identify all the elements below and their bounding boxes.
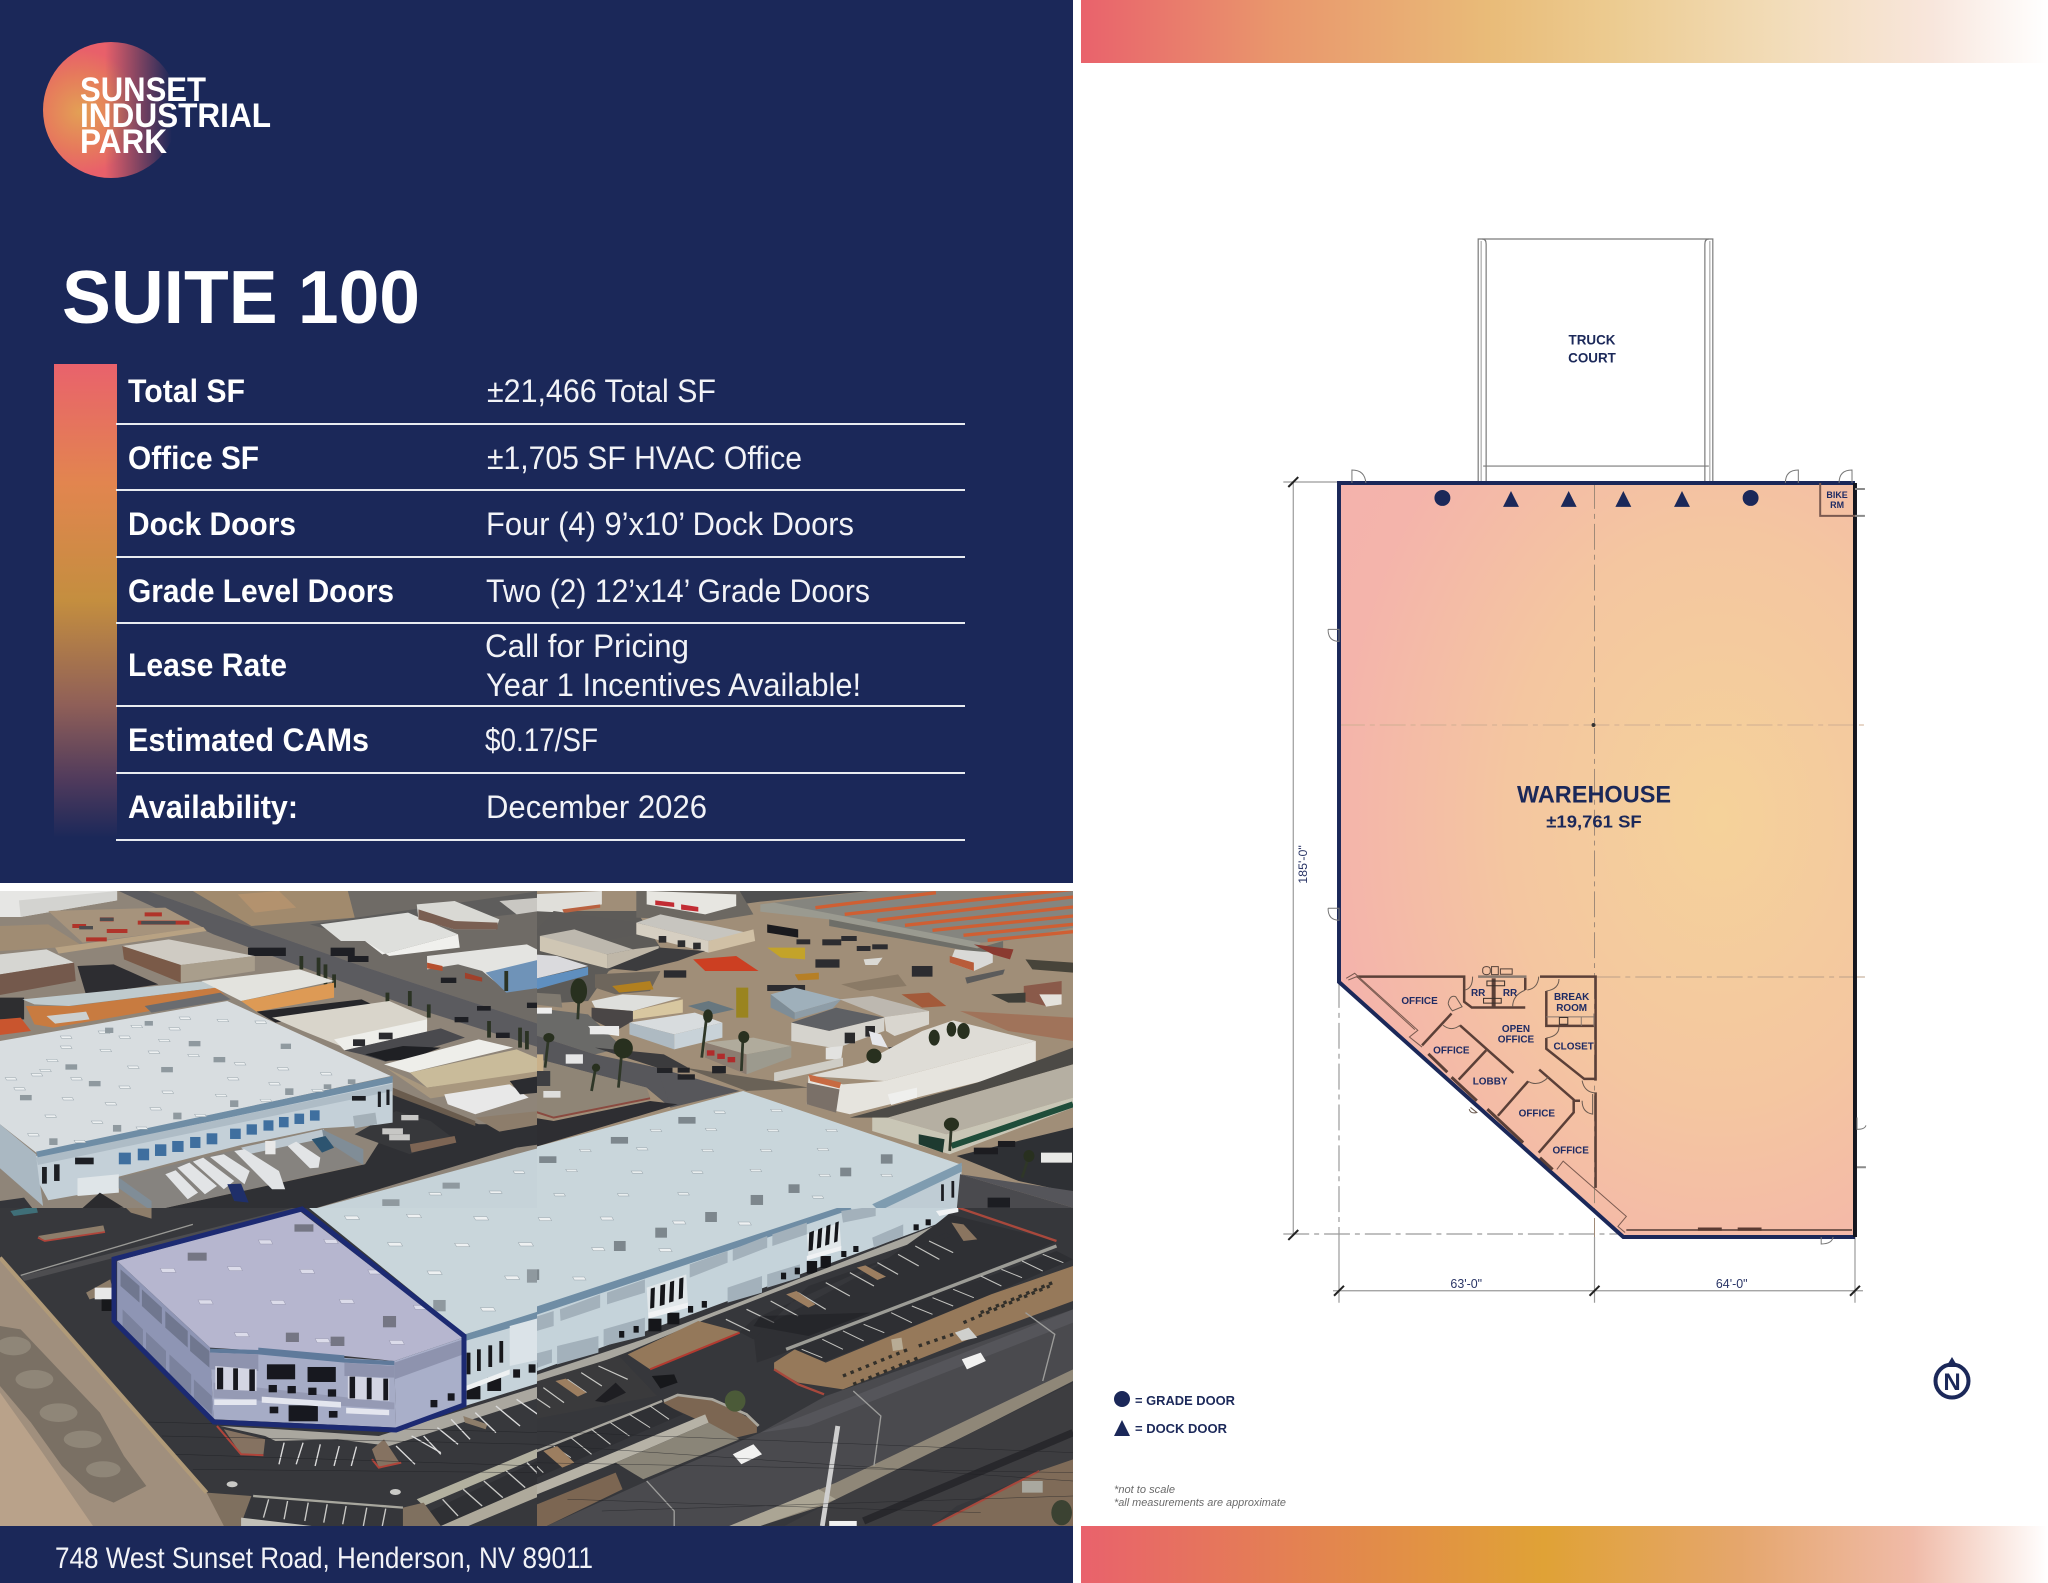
exterior wall — [1328, 470, 1866, 1244]
logo: Sunset Industrial Park: SUNSET — [80, 71, 206, 109]
top gradient band — [1081, 0, 2048, 63]
row: availability — [116, 789, 965, 841]
warehouse floor — [1339, 483, 1855, 1237]
suite outline highlight — [114, 1209, 464, 1430]
address bar — [0, 1526, 1073, 1583]
photo: lower-right area with parking and road — [530, 1204, 1073, 1526]
icon: north arrow — [1936, 1357, 1968, 1398]
grade door markers — [1434, 490, 1759, 506]
row: dock doors: Four (4) 9’x10’ Dock Doors — [486, 506, 854, 542]
panel: suite details — [0, 0, 1073, 883]
row: estimated CAMs — [116, 722, 965, 774]
bike room: RM — [1830, 500, 1844, 510]
aerial photo of the property — [0, 889, 1073, 1526]
row: lease rate: Lease Rate — [128, 647, 287, 683]
dimension labels — [1296, 845, 1748, 1291]
bottom gradient band — [1081, 1526, 2048, 1583]
office room labels: OFFICE — [1433, 1046, 1470, 1057]
photo: upper-left area with large building — [0, 891, 540, 1211]
row: availability: December 2026 — [486, 789, 707, 825]
row: office SF: ±1,705 SF HVAC Office — [487, 440, 802, 476]
icon: north arrow: N — [1943, 1369, 1961, 1396]
row: total SF — [116, 373, 965, 425]
row: lease rate: Year 1 Incentives Available! — [486, 667, 861, 703]
bike room: BIKE — [1826, 490, 1848, 500]
row: grade level doors: Two (2) 12’x14’ Grade Doors — [486, 573, 870, 609]
row: dock doors: Dock Doors — [128, 506, 296, 542]
notes: *all measurements are approximate — [1114, 1497, 1286, 1509]
row: lease rate — [116, 628, 965, 707]
office room labels: OFFICE — [1552, 1145, 1589, 1156]
dimension labels: 63'-0" — [1450, 1277, 1482, 1291]
notes: *not to scale — [1114, 1484, 1175, 1496]
table: specifications — [116, 373, 965, 841]
dimension labels: 64'-0" — [1716, 1277, 1748, 1291]
office room labels — [1401, 988, 1594, 1156]
row: grade level doors — [116, 573, 965, 624]
office room labels: BREAK — [1554, 992, 1590, 1003]
dimension lines — [1283, 477, 1863, 1303]
row: lease rate: Call for Pricing — [485, 628, 689, 664]
title: Suite 100: SUITE 100 — [62, 255, 420, 339]
office room labels: OFFICE — [1519, 1108, 1555, 1119]
legend: dock door: = DOCK DOOR — [1135, 1421, 1228, 1436]
dimension labels: 185'-0" — [1296, 845, 1310, 884]
center lines — [1339, 483, 1865, 1237]
office interior walls — [1346, 967, 1626, 1233]
notes — [1114, 1484, 1286, 1509]
logo: Sunset Industrial Park: PARK — [80, 123, 167, 161]
office room labels: OPEN — [1502, 1024, 1530, 1035]
truck court: COURT — [1568, 350, 1617, 365]
office room labels: LOBBY — [1473, 1077, 1508, 1088]
legend — [1114, 1391, 1236, 1436]
row: estimated CAMs: Estimated CAMs — [128, 722, 369, 758]
row: total SF: Total SF — [128, 373, 245, 409]
truck court: TRUCK — [1569, 333, 1616, 348]
warehouse label: ±19,761 SF — [1546, 812, 1642, 832]
warehouse label — [1517, 782, 1671, 832]
logo: Sunset Industrial Park: INDUSTRIAL — [80, 97, 271, 135]
office room labels: RR — [1503, 988, 1517, 999]
row: office SF — [116, 440, 965, 491]
dock door markers — [1503, 491, 1690, 507]
gradient bar — [54, 364, 117, 838]
photo: upper-right area with storage and small buildings — [533, 889, 1073, 1211]
row: availability: Availability: — [128, 789, 298, 825]
address bar: 748 West Sunset Road, Henderson, NV 89011 — [55, 1542, 593, 1575]
floor plan — [1283, 239, 1866, 1303]
row: estimated CAMs: $0.17/SF — [485, 722, 598, 758]
logo: Sunset Industrial Park — [42, 41, 271, 179]
office room labels: ROOM — [1556, 1003, 1587, 1014]
row: dock doors — [116, 506, 965, 558]
row: grade level doors: Grade Level Doors — [128, 573, 394, 609]
warehouse label: WAREHOUSE — [1517, 782, 1671, 809]
row: office SF: Office SF — [128, 440, 259, 476]
office room labels: RR — [1471, 988, 1485, 999]
office room labels: OFFICE — [1401, 996, 1438, 1007]
bike room — [1820, 483, 1855, 516]
photo: lower-left area with highlighted suite — [0, 1206, 540, 1526]
office room labels: OFFICE — [1498, 1035, 1535, 1046]
row: total SF: ±21,466 Total SF — [487, 373, 716, 409]
truck court — [1478, 239, 1713, 483]
office room labels: CLOSET — [1553, 1042, 1594, 1053]
legend: grade door: = GRADE DOOR — [1135, 1393, 1236, 1408]
